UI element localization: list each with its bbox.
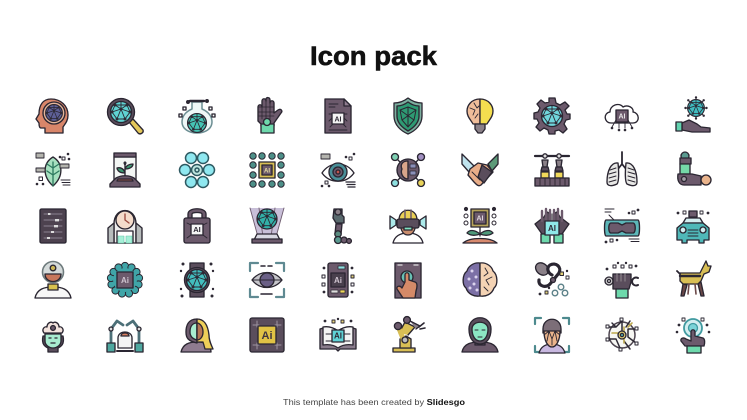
icon: robot leg — [333, 209, 351, 244]
icon: AI processor: Ai — [262, 330, 272, 342]
icon: chip with nodes — [250, 153, 284, 187]
icon: flask with network — [179, 100, 215, 133]
icon: plant in glass — [110, 153, 140, 187]
icon: VR goggles — [604, 209, 640, 243]
icon: robot hands with AI: AI — [548, 224, 556, 233]
icon: half human half robot woman — [181, 319, 213, 352]
icon: smartwatch network — [180, 262, 214, 298]
icon: AI document: AI — [334, 116, 342, 124]
icon: AI processor — [250, 318, 284, 352]
icon: brain circle with nodes — [392, 154, 424, 186]
icon: AI book: AI — [334, 332, 342, 340]
icon: robotic arms and capsule — [107, 321, 143, 352]
icon: half brain bulb — [467, 99, 493, 133]
icon: AI cloud: AI — [618, 114, 626, 120]
icon: AI mobile phone: Ai — [334, 276, 342, 285]
icon: chip with nodes: AI — [264, 168, 270, 174]
icon: gear with network — [534, 98, 570, 134]
icon: AI document — [325, 99, 351, 133]
icon: AI mobile phone — [322, 263, 354, 297]
icon: lungs — [607, 152, 637, 186]
icon: robot hand holding network — [676, 96, 710, 132]
icon: AI padlock — [184, 209, 210, 243]
icon: face recognition — [535, 318, 569, 353]
icon: touch interface finger — [676, 318, 710, 353]
icon: robot hands with AI — [535, 209, 569, 243]
icon: AI padlock: AI — [193, 225, 201, 234]
icon grid — [35, 96, 711, 353]
icon: hologram network — [250, 208, 284, 243]
icon: shield with network — [394, 98, 422, 134]
icon: leaf with data — [36, 153, 70, 186]
icon: bionic arm — [678, 152, 711, 185]
icon: tablet touch — [395, 263, 421, 298]
icon: AI chip network ring: Ai — [121, 276, 129, 285]
icon: circuit globe — [606, 318, 638, 351]
footer credit: This template has been created by Slidesgo — [283, 398, 465, 407]
icon: chain links and molecules — [533, 260, 569, 296]
icon: autonomous car — [677, 211, 709, 243]
icon: AI chip network ring — [107, 262, 143, 297]
icon: robotic hand — [258, 98, 282, 133]
icon: VR headset user — [390, 210, 426, 243]
icon: half digital brain — [463, 263, 497, 296]
icon: astronaut android — [35, 262, 71, 298]
icon: factory robot line — [535, 154, 569, 186]
icon: eye with data — [321, 153, 355, 187]
icon: AI chip plant — [463, 208, 497, 243]
icon: AI chip plant: AI — [476, 216, 484, 222]
icon: robot head thinking — [43, 322, 63, 352]
icon: robot fist — [605, 262, 638, 298]
icon: robot dog — [677, 261, 711, 296]
title: Icon pack — [310, 41, 438, 71]
icon: magnifying glass — [108, 98, 143, 134]
icon: industrial robot arm — [393, 317, 425, 352]
icon: AI book — [320, 318, 356, 351]
icon: eye scan — [250, 263, 284, 297]
icon: human and robot handshake — [462, 154, 498, 186]
icon: slider panel — [40, 209, 66, 243]
icon: hexagon cells — [180, 152, 214, 188]
icon: clock cryo pod — [108, 210, 142, 243]
icon: head with neural network — [36, 99, 68, 133]
icon: AI cloud — [605, 105, 638, 131]
icon: android face — [462, 318, 498, 352]
